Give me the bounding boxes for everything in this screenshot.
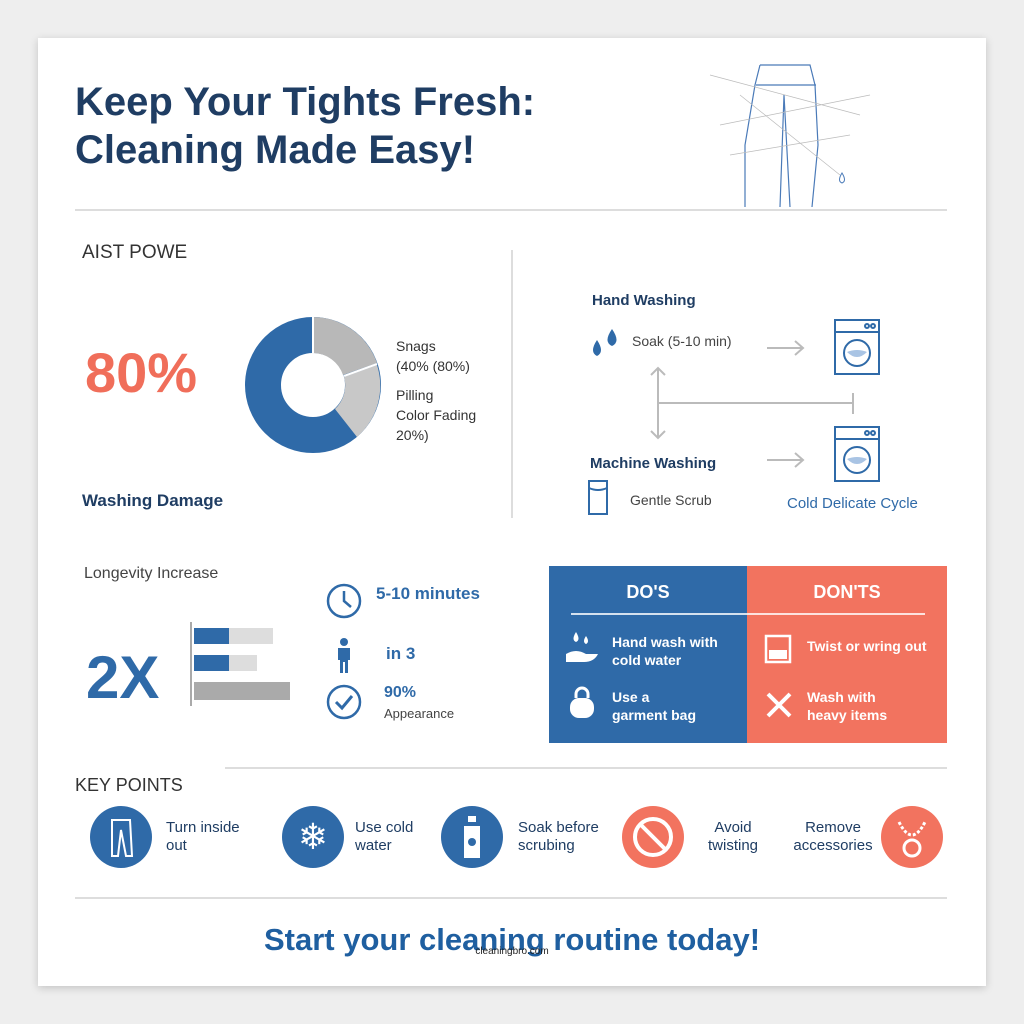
panel: washing methods flow: Soak (5-10 min)	[632, 333, 732, 349]
label: cold delicate cycle: Cold Delicate Cycle	[787, 495, 918, 512]
stats list: Appearance	[384, 706, 454, 721]
icon: no twisting	[622, 806, 684, 868]
panel: do's: Hand wash with	[612, 634, 718, 650]
icon: bottle	[441, 806, 503, 868]
panel: do's: Use a	[612, 689, 649, 705]
arrows	[650, 340, 854, 468]
illustration: tights sketch	[710, 64, 870, 207]
key points row: accessories	[793, 837, 873, 854]
text: 20%)	[396, 427, 429, 443]
icon: X	[766, 692, 792, 718]
icon: snowflake	[282, 806, 344, 868]
key points row	[90, 806, 943, 868]
panel: washing methods flow: Gentle Scrub	[630, 492, 712, 508]
key points row: water	[355, 837, 392, 854]
key points row: Use cold	[355, 819, 413, 836]
panel: washing methods flow	[588, 292, 918, 515]
panel: do's	[549, 566, 747, 743]
title: Keep Your Tights Fresh:	[75, 80, 535, 124]
panel: do's: garment bag	[612, 707, 696, 723]
panel: don'ts: heavy items	[807, 707, 887, 723]
donut legend: (40% (80%)	[396, 358, 470, 374]
call to action: Start your cleaning routine today!	[264, 922, 760, 957]
section heading: AIST POWE	[82, 242, 187, 263]
bar chart	[190, 622, 290, 706]
stats list: 90%	[384, 684, 416, 701]
key points row: Remove	[805, 819, 861, 836]
icon: bag	[588, 480, 608, 515]
panel: do's: DO'S	[626, 582, 670, 602]
text: Pilling	[396, 387, 433, 403]
key points row: Soak before	[518, 819, 599, 836]
panel: don'ts: DON'TS	[813, 582, 881, 602]
icon: check	[326, 684, 362, 720]
icon: person	[338, 638, 350, 673]
key points heading: KEY POINTS	[75, 775, 183, 795]
text: Color Fading	[396, 407, 476, 423]
panel: don'ts: Twist or wring out	[807, 638, 927, 654]
key points row: Avoid	[714, 819, 752, 836]
panel: do's: cold water	[612, 652, 681, 668]
icon: snowflake: ❄	[298, 816, 328, 857]
stats list: 5-10 minutes	[376, 584, 480, 603]
stat 2X: 2X	[86, 644, 159, 711]
key points row: twisting	[708, 837, 758, 854]
key points row: Turn inside	[166, 819, 240, 836]
stats list	[326, 584, 480, 721]
watermark: cleaningbro.com	[475, 946, 549, 957]
title	[75, 80, 535, 172]
heading: hand washing: Hand Washing	[592, 292, 696, 309]
panel: don'ts	[747, 566, 947, 743]
icon: clock	[326, 584, 362, 618]
donut legend: Snags	[396, 338, 436, 354]
icon: tights	[90, 806, 152, 868]
panel: don'ts: Wash with	[807, 689, 876, 705]
icon: washing machines	[834, 319, 880, 375]
stat 80%: 80%	[85, 341, 197, 404]
title: Cleaning Made Easy!	[75, 128, 475, 172]
stats list: in 3	[386, 644, 415, 663]
donut legend	[396, 338, 470, 374]
icon: water drops	[593, 329, 616, 356]
icon: bag	[764, 634, 792, 664]
longevity heading: Longevity Increase	[84, 565, 218, 582]
label: Washing Damage	[82, 491, 223, 510]
donut chart	[245, 317, 381, 453]
icon: lock bag	[570, 686, 594, 718]
icon: accessories	[881, 806, 943, 868]
heading: machine washing: Machine Washing	[590, 455, 716, 472]
icon: hand with water	[566, 632, 598, 662]
key points row: scrubing	[518, 837, 575, 854]
key points row: out	[166, 837, 187, 854]
